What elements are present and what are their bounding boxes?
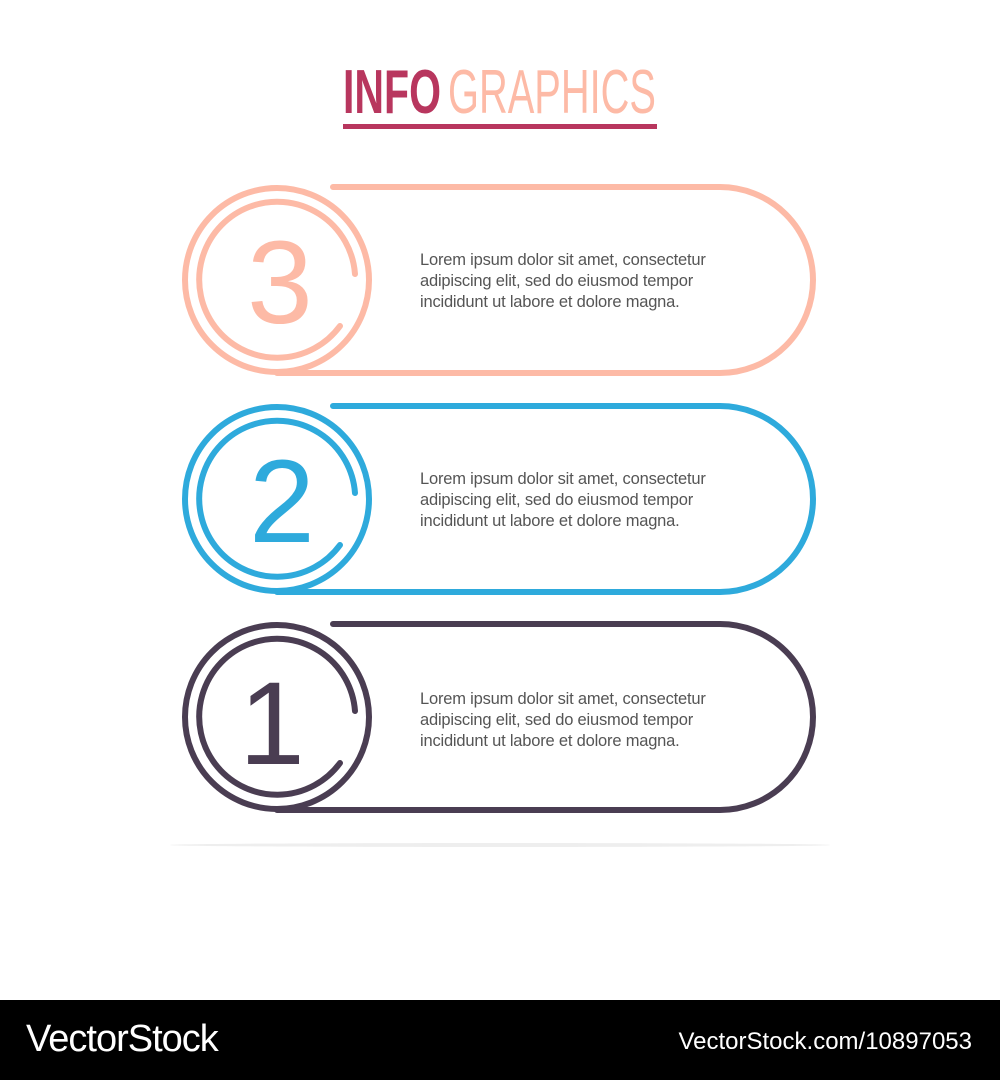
text: step 1: incididunt ut labore et dolore magna. — [420, 732, 680, 750]
text: step 3 — [420, 251, 706, 311]
title — [343, 58, 657, 129]
shadow line — [170, 843, 830, 847]
text: step 1 — [420, 690, 706, 750]
step 1: 1 — [239, 658, 305, 790]
footer logo: VectorStock — [26, 1018, 218, 1060]
text: step 1: adipiscing elit, sed do eiusmod tempor — [420, 711, 693, 729]
text: step 3: Lorem ipsum dolor sit amet, consectetur — [420, 251, 706, 269]
text: step 2 — [420, 470, 706, 530]
footer url: VectorStock.com/10897053 — [678, 1028, 972, 1055]
step 2 — [185, 406, 813, 592]
step 3 — [185, 187, 813, 373]
text: step 2: adipiscing elit, sed do eiusmod tempor — [420, 491, 693, 509]
text: step 1: Lorem ipsum dolor sit amet, consectetur — [420, 690, 706, 708]
footer bar — [0, 1000, 1000, 1080]
text: step 3: adipiscing elit, sed do eiusmod tempor — [420, 272, 693, 290]
step 1 — [185, 624, 813, 810]
title: INFO — [343, 58, 441, 127]
step 3: 3 — [247, 217, 313, 349]
step 2: 2 — [249, 436, 315, 568]
text: step 2: incididunt ut labore et dolore magna. — [420, 512, 680, 530]
text: step 3: incididunt ut labore et dolore magna. — [420, 293, 680, 311]
text: step 2: Lorem ipsum dolor sit amet, consectetur — [420, 470, 706, 488]
